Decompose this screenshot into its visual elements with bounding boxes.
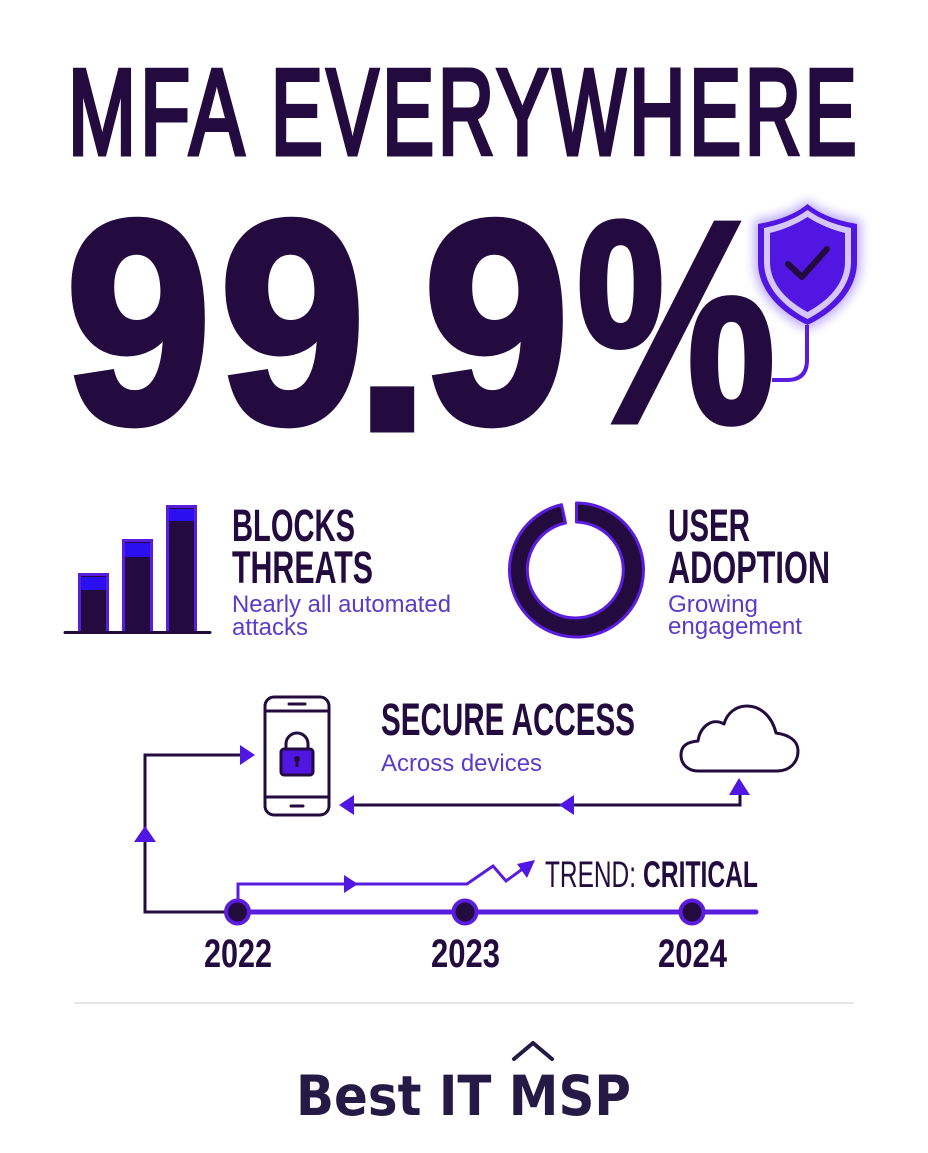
heading: secure access: SECURE ACCESS: [381, 694, 635, 745]
description: user adoption: engagement: [668, 613, 802, 640]
milestone 2023: 2023: [431, 932, 500, 976]
milestone 2022: 2022: [204, 932, 272, 976]
panel: blocks threats: [65, 500, 451, 641]
heading: blocks threats: [232, 500, 373, 593]
description: blocks threats: attacks: [232, 614, 308, 641]
panel: timeline: [204, 854, 758, 976]
heading: user adoption: [668, 500, 830, 593]
arrow: cloud to phone: [339, 778, 750, 815]
logo: Best IT MSP: Best IT MSP: [296, 1064, 631, 1128]
bar chart icon: [65, 506, 210, 632]
panel: secure access: [134, 694, 798, 912]
big statistic: 99.9%: .: [354, 181, 431, 489]
arrow: timeline to phone: [134, 745, 255, 912]
heading: user adoption: ADOPTION: [668, 542, 830, 593]
icon: cloud: [681, 706, 798, 771]
heading: user adoption: USER: [668, 500, 750, 551]
timeline line: [237, 910, 756, 914]
donut chart icon: [509, 503, 643, 637]
milestone 2023: [431, 900, 500, 976]
trend label: [545, 854, 758, 895]
title: EVERYWHERE: [271, 43, 860, 180]
title: MFA: [68, 45, 248, 181]
heading: blocks threats: BLOCKS: [232, 500, 355, 551]
panel: user adoption: [509, 500, 830, 640]
logo: Best IT MSP: [296, 1043, 631, 1128]
description: secure access: Across devices: [381, 750, 542, 777]
description: user adoption: [668, 591, 802, 640]
trend arrow: [238, 860, 535, 900]
big statistic: 99.9%: %: [576, 161, 776, 484]
description: blocks threats: Nearly all automated: [232, 591, 451, 618]
description: blocks threats: [232, 591, 451, 641]
big statistic: 99.9%: 9: [423, 161, 569, 484]
icon: phone with lock: [265, 697, 329, 815]
icon: shield with check and connector: [754, 200, 861, 380]
milestone 2024: [658, 900, 728, 976]
description: user adoption: Growing: [668, 591, 758, 618]
milestone 2024: 2024: [658, 932, 728, 976]
heading: blocks threats: THREATS: [232, 542, 373, 593]
trend label: CRITICAL: [643, 854, 758, 895]
big statistic: 99.9%: 9: [219, 161, 365, 484]
trend label: TREND:: [545, 854, 636, 895]
big statistic: 99.9%: [65, 161, 776, 489]
milestone 2022: [204, 900, 272, 976]
big statistic: 99.9%: 9: [65, 161, 211, 484]
